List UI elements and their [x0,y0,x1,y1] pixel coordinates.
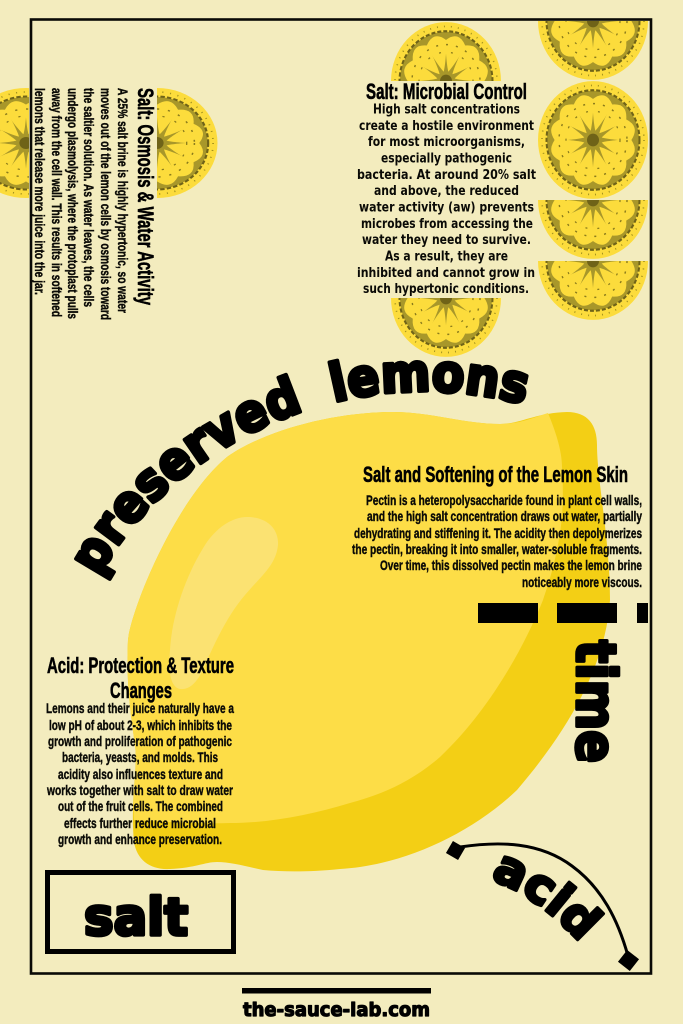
body: microbial control: bacteria. At around 20% salt [357,168,536,183]
lemon body light [127,412,563,823]
body: osmosis [32,88,131,320]
large lemon illustration [127,412,610,871]
lemon highlight [169,517,278,689]
slice: right column whole [538,81,648,199]
body: osmosis: away from the cell wall. This results in softened [49,88,65,317]
body: acid protection: out of the fruit cells. The combined [58,798,223,814]
panel: softening of the lemon skin [352,462,642,590]
panel: microbial control [357,79,536,297]
footer [242,988,431,1021]
body: microbial control [357,102,536,297]
salt box outline [48,872,234,952]
label box: salt [48,872,234,952]
body: acid protection [46,700,234,847]
footer website: the-sauce-lab.com [243,999,430,1021]
body: microbial control: water activity (aw) prevents [359,200,534,216]
slice: bottom middle half [391,298,501,357]
body: microbial control: microbes from accessing the [361,217,533,232]
body: microbial control: As a result, they are [385,250,508,264]
body: microbial control: such hypertonic conditions. [363,282,529,297]
body: microbial control: and above, the reduced [374,184,519,199]
body: acid protection: works together with salt to draw water [46,782,233,798]
slice: right column third [538,200,648,259]
body: microbial control: for most microorganisms, [368,135,525,150]
body: osmosis: A 25% salt brine is highly hypertonic, so water [115,88,131,313]
lemon slices decoration [0,0,648,357]
heading: osmosis: Salt: Osmosis & Water Activity [133,88,158,306]
body: microbial control: inhibited and cannot grow in [357,266,535,281]
body: osmosis: the saltier solution. As water leaves, the cells [81,88,97,307]
body: osmosis: undergo plasmolysis, where the protoplast pulls [65,88,81,319]
title: preserved lemons: preserved lemons [74,358,529,581]
label: time: time [564,640,627,763]
slice: left cut half [0,88,29,198]
curved arrow: acid [446,841,639,971]
body: acid protection: Lemons and their juice naturally have a [46,700,234,716]
body: microbial control: High salt concentrations [373,102,520,118]
lemon body shadow [127,412,610,871]
body: osmosis: lemons that release more juice into the jar. [32,88,48,295]
heading: acid protection: Changes [110,678,172,703]
body: acid protection: effects further reduce microbial [64,815,216,831]
body: microbial control: especially pathogenic [381,152,512,166]
dashed black bars [478,603,648,623]
heading: acid protection [47,653,234,703]
body: acid protection: growth and proliferation of pathogenic [48,733,232,749]
salt word: salt [84,888,188,948]
body: microbial control: water they need to survive. [362,233,531,248]
panel: acid protection and texture [46,653,234,847]
panel: osmosis and water activity (rotated) [32,88,158,320]
slice: top middle half [391,22,501,81]
body: acid protection: low pH of about 2-3, which inhibits the [49,717,232,733]
body: microbial control: create a hostile environment [359,119,534,134]
footer bar [242,988,431,994]
body: softening [352,492,642,590]
curve line [460,844,628,956]
slice: left right-facing half [157,88,218,198]
acid word: acid [492,855,606,942]
curve start handle [446,841,465,860]
body: acid protection: bacteria, yeasts, and molds. This [62,749,218,765]
curve end handle [618,950,639,971]
body: acid protection: growth and enhance preservation. [58,831,222,847]
heading: acid protection: Acid: Protection & Texture [47,653,234,678]
slice: right column fourth [538,261,648,320]
body: acid protection: acidity also influences texture and [58,766,223,782]
slice: right column top half [538,21,648,80]
heading: microbial control: Salt: Microbial Control [366,79,527,104]
body: osmosis: moves out of the lemon cells by osmosis toward [98,88,114,320]
